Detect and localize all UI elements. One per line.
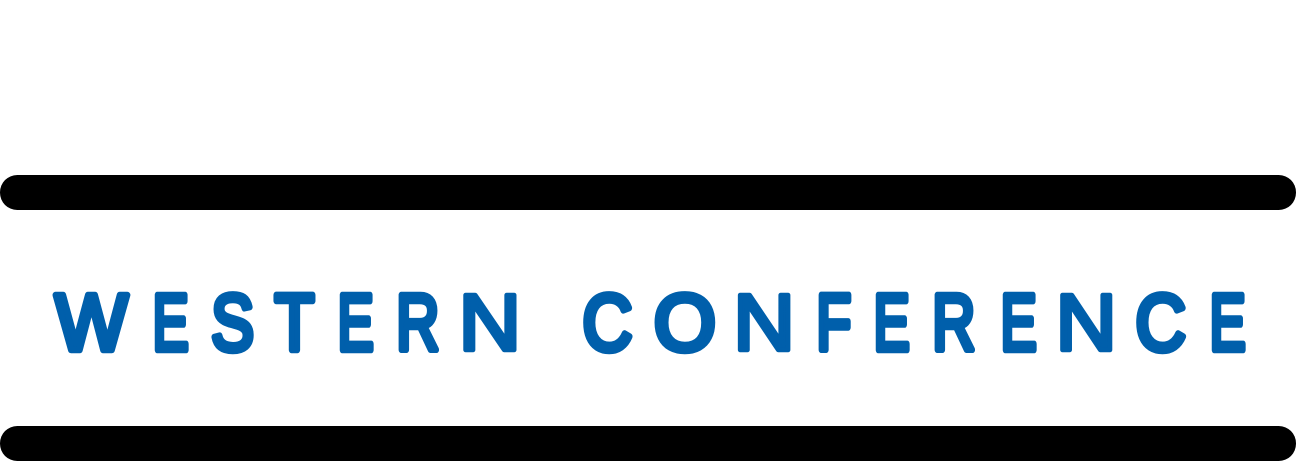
- heading: Western Conference: N: [1056, 278, 1117, 367]
- heading: Western Conference: E: [338, 278, 374, 367]
- heading: Western Conference: F: [816, 278, 851, 367]
- heading: Western Conference: E: [1210, 278, 1246, 367]
- heading: Western Conference: T: [275, 278, 314, 367]
- heading: Western Conference: E: [152, 278, 189, 367]
- top black rounded bar: [0, 175, 1296, 210]
- heading: Western Conference: W: [55, 278, 128, 367]
- heading: Western Conference: N: [459, 278, 521, 367]
- heading: Western Conference: C: [582, 278, 632, 367]
- heading: Western Conference: E: [1000, 278, 1037, 367]
- heading: Western Conference: N: [733, 278, 795, 367]
- heading: Western Conference: E: [874, 278, 910, 367]
- heading: Western Conference: R: [396, 278, 439, 367]
- heading: Western Conference: O: [654, 278, 716, 367]
- heading: Western Conference: C: [1136, 278, 1186, 367]
- heading: Western Conference: S: [211, 278, 254, 367]
- heading: Western Conference: R: [932, 278, 975, 367]
- bottom black rounded bar: [0, 426, 1296, 460]
